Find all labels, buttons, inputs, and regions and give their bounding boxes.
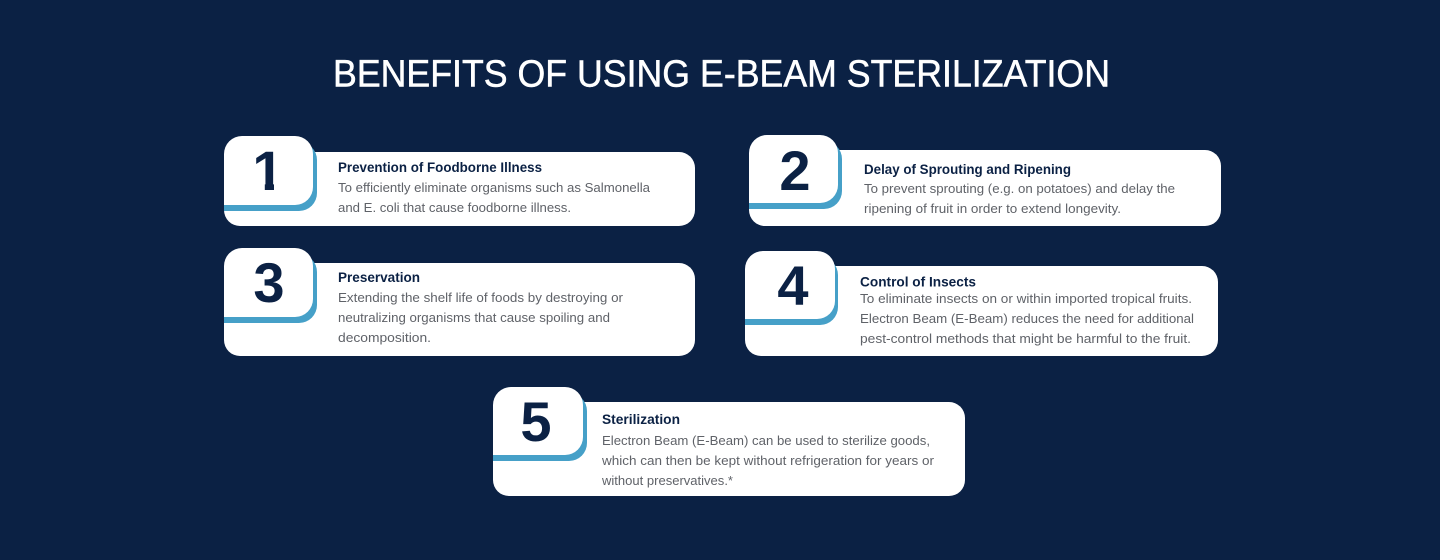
heading 4: Control of Insects (860, 274, 976, 290)
badge 3 (224, 248, 317, 323)
body 3: Extending the shelf life of foods by destroying or (338, 290, 624, 305)
badge 4: 4 (777, 254, 809, 317)
badge 2 (749, 135, 842, 209)
body 3 (338, 290, 624, 345)
body 1 (338, 180, 651, 215)
panel: card 3 preservation (224, 248, 695, 356)
heading 3: Preservation (338, 270, 420, 285)
body 4: Electron Beam (E-Beam) reduces the need for additional (860, 311, 1194, 326)
body 2: To prevent sprouting (e.g. on potatoes) and delay the (864, 181, 1175, 196)
body 5: Electron Beam (E-Beam) can be used to sterilize goods, (602, 433, 930, 448)
panel: card 1 prevention of foodborne illness (224, 136, 695, 226)
body 2 (864, 181, 1175, 216)
body 5 (601, 433, 935, 488)
badge 1: 1 (252, 139, 284, 202)
badge 4 (745, 251, 838, 325)
panel: card 5 sterilization (493, 387, 965, 496)
heading 5: Sterilization (602, 412, 680, 427)
panel: card 4 control of insects (745, 251, 1218, 356)
heading 2: Delay of Sprouting and Ripening (864, 162, 1071, 177)
body 2: ripening of fruit in order to extend longevity. (864, 201, 1121, 216)
badge 5 (493, 387, 587, 461)
badge 2: 2 (779, 139, 811, 202)
heading 1: Prevention of Foodborne Illness (338, 160, 542, 175)
badge 5: 5 (520, 390, 552, 453)
panel: card 2 delay of sprouting and ripening (749, 135, 1221, 226)
body 4 (860, 291, 1194, 346)
badge 3: 3 (253, 251, 285, 314)
badge 1 (224, 136, 317, 211)
body 1: and E. coli that cause foodborne illness. (338, 200, 571, 215)
body 1: To efficiently eliminate organisms such as Salmonella (338, 180, 651, 195)
body 3: decomposition. (338, 330, 431, 345)
body 5: which can then be kept without refrigeration for years or (601, 453, 935, 468)
body 4: To eliminate insects on or within imported tropical fruits. (860, 291, 1192, 306)
body 5: without preservatives.* (601, 473, 733, 488)
body 3: neutralizing organisms that cause spoiling and (338, 310, 610, 325)
body 4: pest-control methods that might be harmful to the fruit. (860, 331, 1191, 346)
title: BENEFITS OF USING E-BEAM STERILIZATION (333, 54, 1110, 96)
